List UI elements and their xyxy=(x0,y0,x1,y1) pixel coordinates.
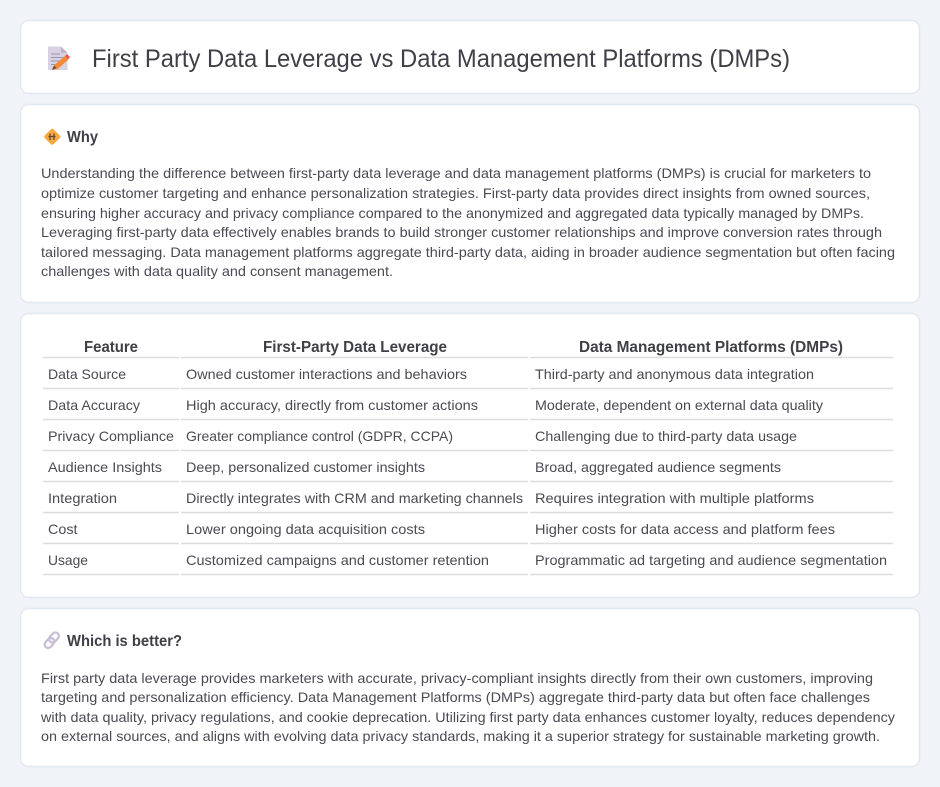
row: integration: Directly integrates with CRM and marketing channels xyxy=(186,490,523,506)
text block: why: optimize customer targeting and enhance personalization strategies. First-party data provides direct insights from owned sources, xyxy=(41,185,870,201)
row: cost: Higher costs for data access and platform fees xyxy=(535,521,835,537)
row: data source: Third-party and anonymous data integration xyxy=(535,366,814,382)
row: cost xyxy=(48,521,835,537)
table header: Feature xyxy=(84,339,138,356)
row: integration: Integration xyxy=(48,490,117,506)
row: usage: Usage xyxy=(48,552,88,568)
text block: why: Understanding the difference between first-party data leverage and data management platforms (DMPs) is crucial for marketers to xyxy=(41,165,871,181)
table header xyxy=(84,339,843,356)
text block: which is better: targeting and personalization efficiency. Data Management Platforms (DMPs) aggregate third-party data but often face challenges xyxy=(41,689,870,705)
icon: diamond sign xyxy=(43,128,61,146)
row: privacy compliance: Privacy Compliance xyxy=(48,428,174,444)
icon: memo with pencil xyxy=(48,46,70,70)
text block: which is better: with data quality, privacy regulations, and cookie deprecation. Utilizing first party data enhances customer loyalty, reduces dependency xyxy=(40,709,895,725)
row: usage: Customized campaigns and customer retention xyxy=(186,552,489,568)
row: audience insights: Broad, aggregated audience segments xyxy=(535,459,781,475)
text block: why: tailored messaging. Data management platforms aggregate third-party data, aiding in broader audience segmentation but often facing xyxy=(41,244,895,260)
row: integration: Requires integration with multiple platforms xyxy=(535,490,814,506)
text block: which is better: on external sources, and aligns with evolving data privacy standards, making it a superior strategy for sustainable marketing growth. xyxy=(41,728,880,744)
row: usage: Programmatic ad targeting and audience segmentation xyxy=(535,552,887,568)
text block: which is better: First party data leverage provides marketers with accurate, privacy-compliant insights directly from their own customers, improving xyxy=(41,670,873,686)
text block: why xyxy=(41,165,895,279)
row: audience insights: Audience Insights xyxy=(48,459,162,475)
panel: why xyxy=(20,104,920,302)
panel: which is better xyxy=(20,608,920,766)
panel: comparison table xyxy=(20,314,920,598)
table header: Data Management Platforms (DMPs) xyxy=(579,339,843,356)
title: First Party Data Leverage vs Data Management Platforms (DMPs) xyxy=(92,45,790,73)
row: audience insights: Deep, personalized customer insights xyxy=(186,459,425,475)
row: data accuracy xyxy=(48,397,823,413)
row: privacy compliance: Challenging due to third-party data usage xyxy=(535,428,797,444)
text block: why: ensuring higher accuracy and privacy compliance compared to the anonymized and aggregated data typically managed by DMPs. xyxy=(41,205,864,221)
row: privacy compliance: Greater compliance control (GDPR, CCPA) xyxy=(186,428,453,444)
text block: why: challenges with data quality and consent management. xyxy=(41,263,393,279)
row: data accuracy: High accuracy, directly from customer actions xyxy=(186,397,478,413)
text block: which is better xyxy=(40,670,895,744)
row: cost: Lower ongoing data acquisition costs xyxy=(186,521,425,537)
row: privacy compliance xyxy=(48,428,797,444)
table header: First-Party Data Leverage xyxy=(263,339,447,356)
icon: link xyxy=(43,631,60,649)
text block: why: Leveraging first-party data effectively enables brands to build stronger customer relationships and improve conversion rates through xyxy=(41,224,882,240)
row: integration xyxy=(48,490,814,506)
row: data accuracy: Data Accuracy xyxy=(48,397,140,413)
heading: why: Why xyxy=(67,129,98,146)
heading: which is better: Which is better? xyxy=(67,633,182,650)
row: data source: Data Source xyxy=(48,366,126,382)
row: data source xyxy=(48,366,814,382)
row: data accuracy: Moderate, dependent on external data quality xyxy=(535,397,823,413)
panel: header xyxy=(20,20,920,94)
row: audience insights xyxy=(48,459,781,475)
row: usage xyxy=(48,552,887,568)
row: cost: Cost xyxy=(48,521,78,537)
row: data source: Owned customer interactions and behaviors xyxy=(186,366,467,382)
